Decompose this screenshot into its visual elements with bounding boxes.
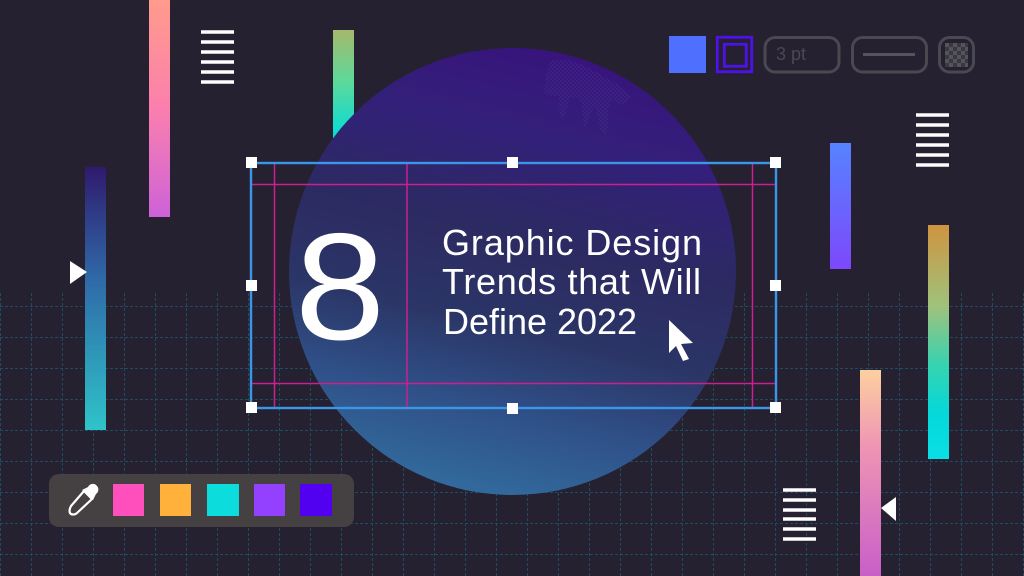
colour palette panel — [49, 474, 354, 527]
swatch: turquoise — [207, 484, 239, 516]
gradient bar: coral to magenta — [149, 0, 170, 217]
gradient bar: peach to magenta — [860, 370, 881, 576]
background grid — [0, 293, 1024, 576]
gradient bar: green to teal — [333, 30, 354, 160]
icon: double stroke square — [717, 37, 752, 72]
gradient bar: blue to violet — [830, 143, 851, 269]
stroke style field — [852, 38, 926, 72]
stroke weight field — [765, 38, 839, 72]
title: Define 2022 — [443, 301, 637, 342]
swatch: indigo — [300, 484, 332, 516]
halftone dot texture — [544, 59, 630, 134]
line stack: top right — [916, 113, 949, 167]
stroke weight field: 3 pt — [776, 44, 806, 64]
big number 8: 8 — [295, 203, 385, 372]
blue selection rectangle — [251, 163, 776, 408]
icon: left-pointing marker — [881, 497, 896, 521]
gradient bar: indigo to teal — [85, 167, 106, 430]
line stack: top left — [201, 30, 234, 84]
central gradient circle — [289, 48, 736, 495]
icon: mouse cursor — [669, 320, 693, 361]
swatch: violet — [254, 484, 285, 516]
gradient bar: amber to cyan — [928, 225, 949, 459]
swatch: pink — [113, 484, 144, 516]
magenta guide lines — [251, 163, 776, 408]
title — [442, 222, 702, 342]
swatch: orange — [160, 484, 191, 516]
icon: eyedropper — [70, 484, 98, 514]
transparency field — [940, 38, 974, 72]
icon: right-pointing marker — [70, 261, 87, 284]
title: Graphic Design — [442, 222, 702, 263]
selection frame with guides — [246, 157, 781, 414]
line stack: bottom right — [783, 488, 816, 541]
toolbar: stroke and fill controls — [669, 36, 974, 73]
title: Trends that Will — [442, 261, 701, 302]
fill swatch — [669, 36, 706, 73]
selection handles — [246, 157, 781, 414]
